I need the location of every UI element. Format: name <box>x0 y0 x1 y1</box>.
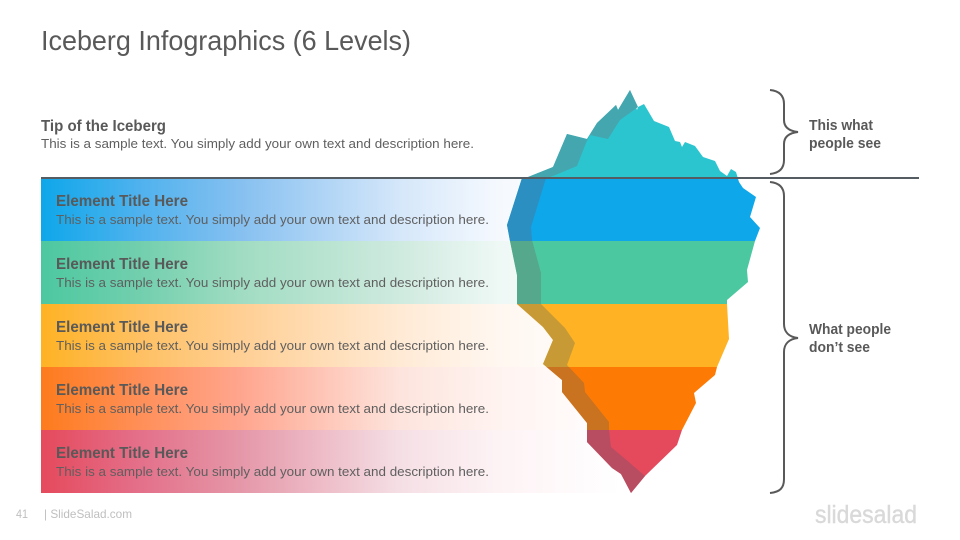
panel: element band 5 <box>41 430 620 493</box>
panel: element band 4: This is a sample text. You simply add your own text and description here. <box>56 401 489 416</box>
logo wordmark: slidesalad <box>815 501 917 529</box>
title: Iceberg Infographics (6 Levels) <box>41 25 411 56</box>
label: this what people see <box>809 117 881 152</box>
footer source: | SlideSalad.com <box>44 507 132 521</box>
label: what people don't see: don’t see <box>809 339 870 356</box>
panel: element band 4: Element Title Here <box>56 382 188 399</box>
brace: below water <box>770 182 798 493</box>
label: this what people see: people see <box>809 135 881 152</box>
tip of the iceberg text block <box>41 118 474 151</box>
panel: element band 3 <box>41 304 620 367</box>
brace: above water <box>770 90 798 174</box>
tip of the iceberg text block: This is a sample text. You simply add your own text and description here. <box>41 136 474 151</box>
panel: element band 5: This is a sample text. You simply add your own text and description here. <box>56 464 489 479</box>
panel: element band 2 <box>41 241 620 304</box>
panel: element band 1: Element Title Here <box>56 193 188 210</box>
label: what people don't see <box>809 321 891 356</box>
waterline <box>41 177 919 179</box>
iceberg illustration <box>500 80 770 493</box>
label: what people don't see: What people <box>809 321 891 338</box>
panel: element band 3: Element Title Here <box>56 319 188 336</box>
label: this what people see: This what <box>809 117 873 134</box>
panel: element band 5: Element Title Here <box>56 445 188 462</box>
panel: element band 2: Element Title Here <box>56 256 188 273</box>
panel: element band 3: This is a sample text. You simply add your own text and description here. <box>56 338 489 353</box>
page number: 41 <box>16 507 28 521</box>
panel: element band 2: This is a sample text. You simply add your own text and description here. <box>56 275 489 290</box>
panel: element band 1: This is a sample text. You simply add your own text and description here. <box>56 212 489 227</box>
tip of the iceberg text block: Tip of the Iceberg <box>41 118 166 135</box>
panel: element band 4 <box>41 367 620 430</box>
panel: element band 1 <box>41 178 620 241</box>
